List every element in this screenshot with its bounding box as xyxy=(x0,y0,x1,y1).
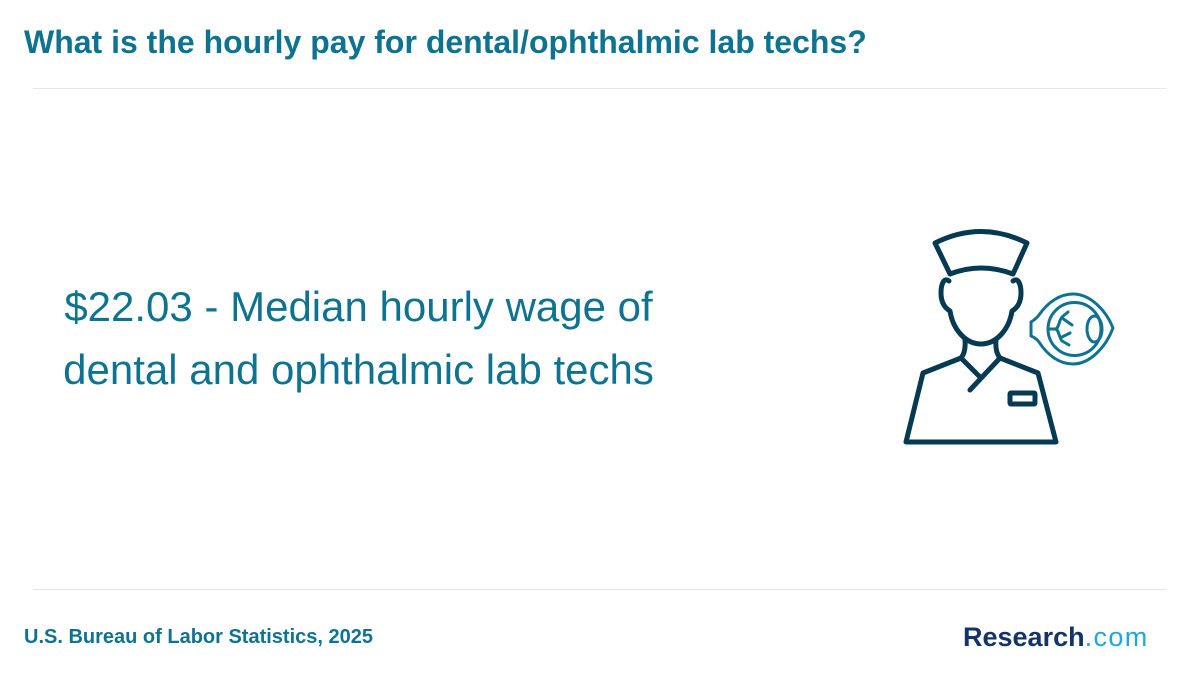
main statistic text: $22.03 - Median hourly wage of xyxy=(64,283,653,330)
main statistic text: dental and ophthalmic lab techs xyxy=(63,346,654,393)
title: What is the hourly pay for dental/ophthalmic lab techs? xyxy=(24,24,867,60)
logo: Research.com: Research.com xyxy=(963,622,1149,652)
icon: eye xyxy=(1031,294,1113,364)
source note: U.S. Bureau of Labor Statistics, 2025 xyxy=(24,626,373,648)
main statistic text xyxy=(63,283,654,393)
icon: technician figure xyxy=(906,232,1056,442)
